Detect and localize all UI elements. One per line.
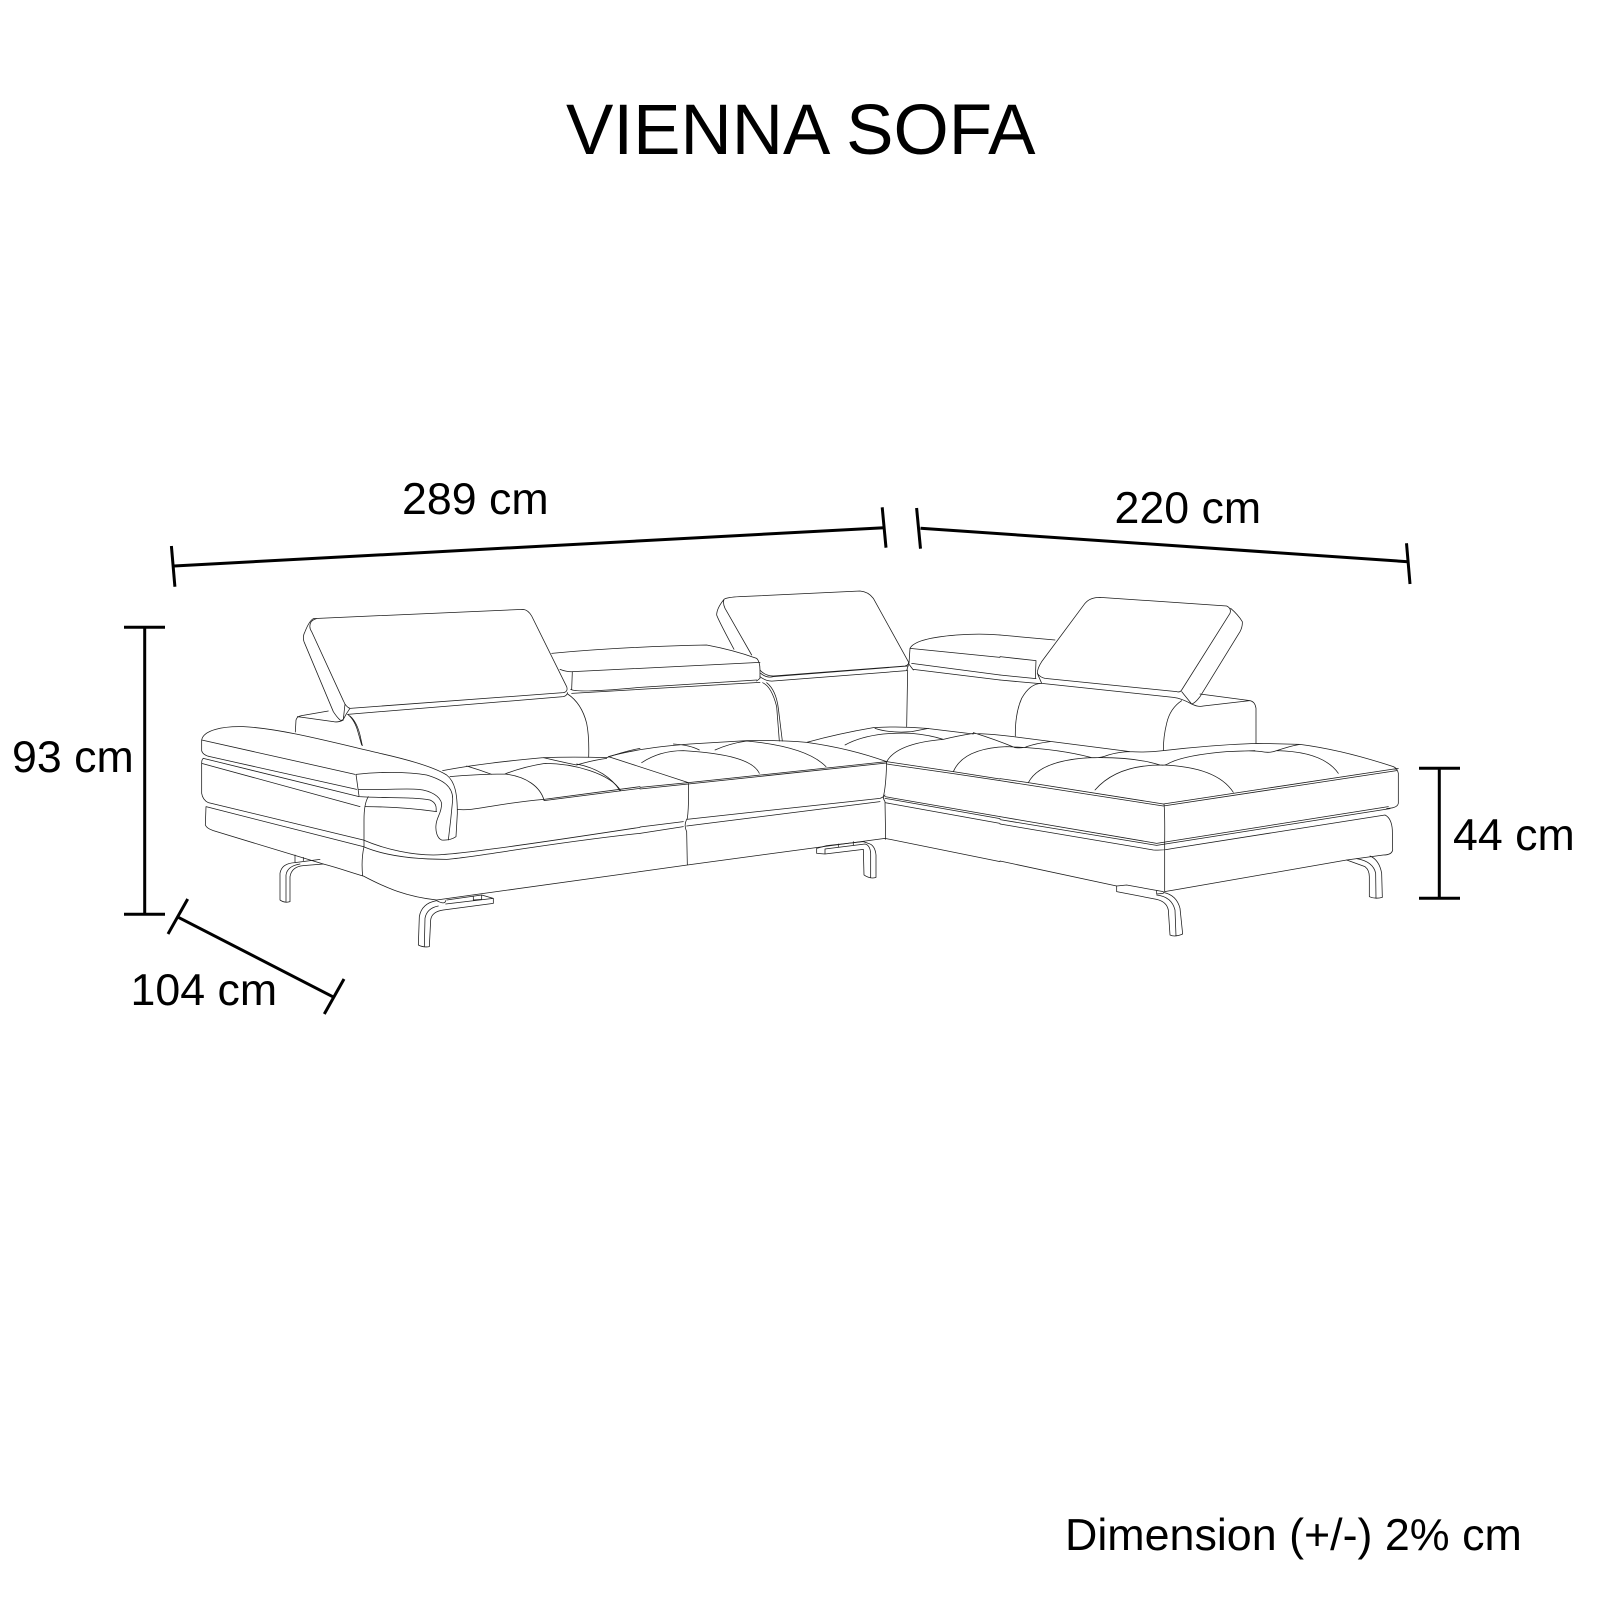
centre seams and band	[640, 762, 1000, 872]
neck and corner edges	[763, 670, 908, 741]
right back block	[1015, 683, 1256, 751]
dimension: 289 cm width: 289 cm	[402, 475, 549, 524]
dimension: 220 cm width	[917, 484, 1410, 584]
back block between headrests	[552, 645, 760, 693]
middle headrest	[717, 591, 913, 681]
dimension: 289 cm width	[171, 475, 886, 587]
neck and back cushion edge	[348, 694, 589, 757]
title: VIENNA SOFA	[566, 91, 1036, 170]
sofa line drawing	[202, 591, 1398, 947]
corner back block	[909, 634, 1000, 680]
tolerance note: Dimension (+/-) 2% cm	[1065, 1510, 1522, 1560]
arm side and base	[202, 758, 640, 900]
dimension: 220 cm width: 220 cm	[1114, 484, 1261, 533]
right headrest	[1037, 597, 1242, 704]
rear centre leg	[817, 842, 876, 878]
chaise seat cushion and tufts	[953, 733, 1398, 808]
rear right leg	[1347, 856, 1382, 898]
sofa: left section with armrest and headrest	[202, 609, 640, 947]
centre seat cushion and tufts	[577, 727, 1000, 791]
front right leg	[1117, 885, 1183, 936]
chaise base and band	[1000, 804, 1393, 892]
back side block	[295, 711, 343, 732]
dimension: 104 cm depth: 104 cm	[130, 966, 277, 1015]
dimension: 104 cm depth	[130, 899, 344, 1015]
left seat cushion	[443, 748, 640, 810]
sofa: right chaise section with headrest	[953, 597, 1398, 936]
left headrest	[303, 609, 568, 720]
dimension: 93 cm height: 93 cm	[12, 733, 134, 782]
left corner block continuation	[1000, 635, 1055, 684]
dimension: 44 cm seat height: 44 cm	[1453, 811, 1575, 860]
rear left leg	[280, 855, 323, 902]
front left leg	[418, 895, 493, 947]
armrest	[202, 727, 457, 840]
sofa: centre section with middle headrest	[552, 591, 1000, 878]
